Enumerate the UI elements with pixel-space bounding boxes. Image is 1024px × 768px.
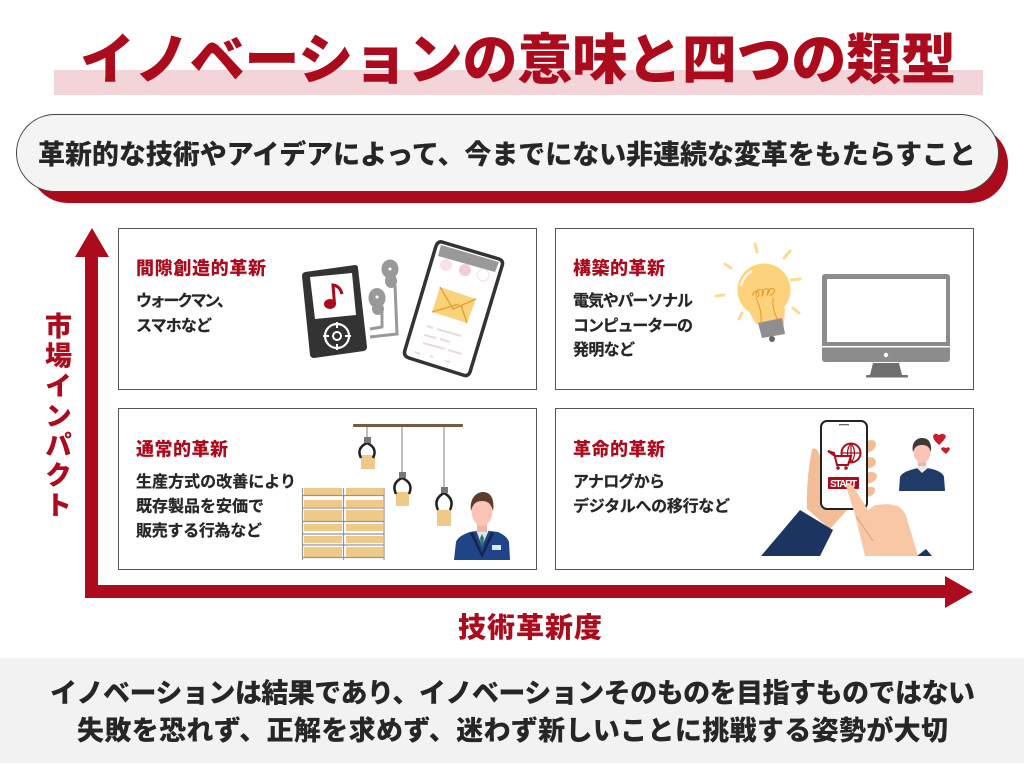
text: architectural examples: 発明など — [573, 341, 635, 359]
bottom message band — [0, 658, 1024, 763]
panel: revolutionary — [556, 408, 974, 570]
arrow: technology innovation axis — [85, 576, 973, 608]
icon: business person — [454, 492, 510, 560]
icon: happy customer — [899, 434, 950, 491]
text: regular examples: 販売する行為など — [136, 522, 262, 540]
heading: regular: 通常的革新 — [136, 438, 228, 460]
text: architectural examples: コンピューターの — [573, 317, 693, 335]
icon: light bulb — [716, 244, 800, 342]
heading: architectural: 構築的革新 — [573, 258, 665, 278]
axis label: market impact: 市場インパクト — [41, 312, 72, 518]
text: revolutionary examples: デジタルへの移行など — [573, 496, 730, 516]
heading: revolutionary: 革命的革新 — [573, 438, 665, 460]
text: gap creation examples: ウォークマン、 — [136, 292, 233, 310]
icon: smartphone with mail — [404, 242, 503, 376]
message line 1: イノベーションは結果であり、イノベーションそのものを目指すものではない — [50, 678, 975, 708]
text: architectural examples: 電気やパーソナル — [573, 291, 693, 310]
text: gap creation examples: スマホなど — [136, 317, 212, 335]
icon: hands with smartphone — [761, 421, 932, 556]
icon: warehouse shelf — [302, 488, 384, 560]
panel: gap creation — [118, 228, 536, 390]
text: regular examples: 既存製品を安価で — [136, 496, 264, 516]
text: gap creation examples — [136, 292, 233, 335]
panel: architectural — [556, 228, 974, 390]
definition banner: 革新的な技術やアイデアによって、今までにない非連続な変革をもたらすこと — [38, 139, 976, 170]
icon: desktop computer — [822, 274, 950, 378]
text: architectural examples — [573, 291, 693, 359]
icon: music player and earphones — [302, 260, 398, 358]
text: revolutionary examples: アナログから — [573, 472, 665, 491]
text: revolutionary examples — [573, 472, 730, 516]
panel: regular — [118, 408, 536, 570]
message line 2: 失敗を恐れず、正解を求めず、迷わず新しいことに挑戦する姿勢が大切 — [77, 715, 948, 746]
text: regular examples: 生産方式の改善により — [136, 472, 296, 491]
axis label: technology innovation: 技術革新度 — [458, 612, 602, 643]
title: イノベーションの意味と四つの類型 — [80, 29, 956, 91]
icon: robot arms — [353, 424, 463, 526]
heading: gap creation: 間隙創造的革新 — [136, 258, 266, 278]
icon: hands with smartphone: START — [830, 479, 857, 490]
text: regular examples — [136, 472, 296, 540]
arrow: market impact axis — [75, 228, 109, 598]
definition banner — [16, 114, 1008, 203]
